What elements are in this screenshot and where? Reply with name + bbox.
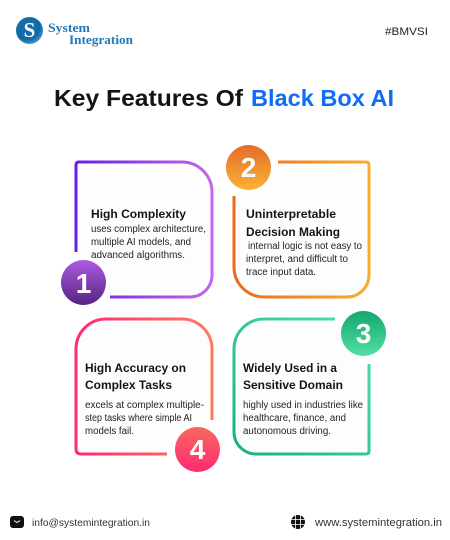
heading: High Accuracy on Complex Tasks (85, 361, 186, 392)
text: feature 3 description (243, 400, 363, 437)
panel: feature 1 High Complexity (61, 162, 212, 305)
text: feature 1 description: multiple AI models, and (91, 237, 191, 248)
text: feature 4 description: step tasks where simple AI (85, 413, 192, 424)
icon: number 3 badge: 3 (356, 318, 371, 349)
heading: Widely Used in a Sensitive Domain: Widely Used in a (243, 361, 337, 375)
text: feature 4 description: models fail. (85, 426, 134, 437)
heading: Widely Used in a Sensitive Domain: Sensitive Domain (243, 378, 343, 392)
panel: feature 3 Widely Used in a Sensitive Domain (234, 311, 386, 454)
logo: System Integration: S (24, 18, 35, 42)
heading: High Accuracy on Complex Tasks: Complex Tasks (85, 378, 172, 392)
icon: number 2 badge (226, 145, 271, 190)
panel: feature 4 High Accuracy on Complex Tasks (76, 319, 220, 472)
text: feature 2 description (246, 241, 362, 278)
text: feature 3 description: autonomous driving. (243, 426, 331, 437)
title: Key Features Of (54, 85, 243, 111)
text: feature 1 description (91, 224, 206, 261)
logo: System Integration (16, 17, 134, 47)
icon: number 2 badge: 2 (241, 152, 256, 183)
logo: System Integration: Integration (69, 32, 134, 47)
text: feature 4 description (85, 400, 204, 437)
hashtag: #BMVSI (385, 26, 428, 38)
heading: Uninterpretable Decision Making: Decision Making (246, 225, 340, 239)
text: feature 1 description: uses complex architecture, (91, 224, 206, 235)
title (54, 85, 394, 111)
icon: number 1 badge (61, 260, 106, 305)
text: feature 2 description: internal logic is not easy to (248, 241, 362, 252)
heading: Uninterpretable Decision Making: Uninterpretable (246, 207, 336, 221)
icon: number 1 badge: 1 (76, 268, 91, 299)
title: Black Box AI (251, 85, 394, 111)
footer: email contact: info@systemintegration.in (32, 517, 150, 529)
footer: website contact: www.systemintegration.in (314, 517, 442, 529)
heading: Uninterpretable Decision Making (246, 207, 340, 239)
text: feature 3 description: highly used in industries like (243, 400, 363, 411)
icon: number 4 badge: 4 (190, 434, 206, 465)
logo: System Integration: System (48, 20, 90, 35)
heading: High Accuracy on Complex Tasks: High Accuracy on (85, 361, 186, 375)
icon: number 4 badge (175, 427, 220, 472)
text: feature 2 description: trace input data. (246, 267, 316, 278)
icon: number 3 badge (341, 311, 386, 356)
text: feature 1 description: advanced algorithms. (91, 250, 185, 261)
heading: High Complexity: High Complexity (91, 207, 186, 221)
panel: feature 2 Uninterpretable Decision Making (226, 145, 369, 297)
text: feature 3 description: healthcare, finance, and (243, 413, 346, 424)
text: feature 4 description: excels at complex multiple- (85, 400, 204, 411)
icon: envelope (10, 516, 24, 528)
icon: globe (291, 515, 305, 529)
heading: Widely Used in a Sensitive Domain (243, 361, 343, 392)
text: feature 2 description: interpret, and difficult to (246, 254, 348, 265)
